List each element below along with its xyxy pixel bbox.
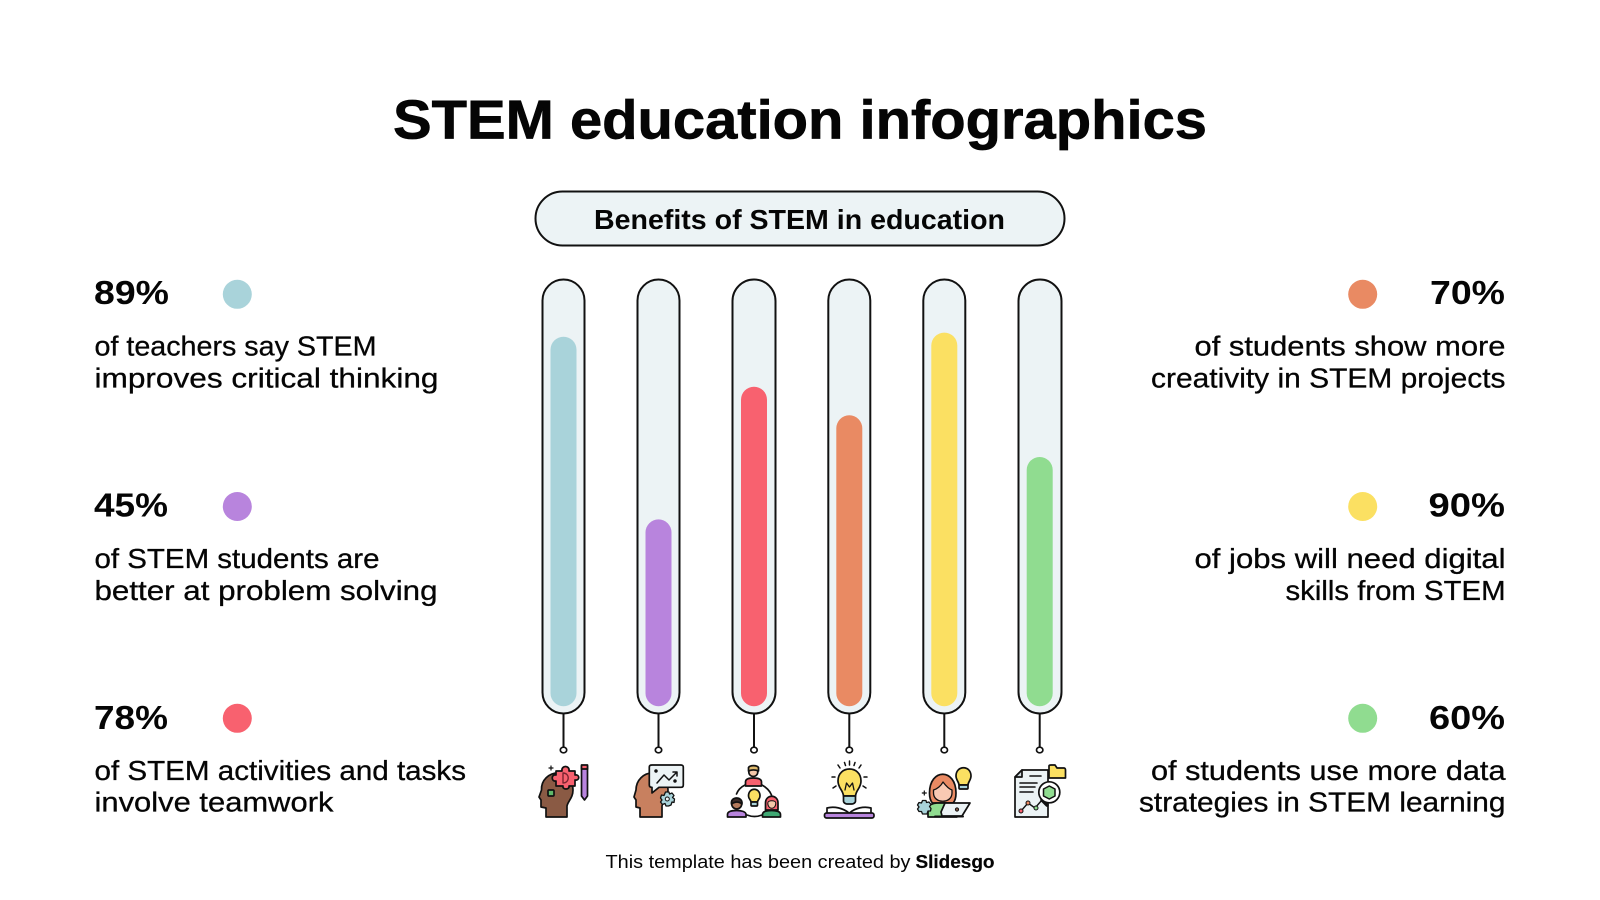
stat: 70% creativity: 70%: [1430, 274, 1505, 311]
tube: 78%: [732, 280, 776, 753]
tube chart: [542, 280, 1062, 753]
tube: 89%: [542, 280, 584, 753]
footer credit: This template has been created by: [606, 852, 910, 872]
stat: 90% jobs: skills from STEM: [1286, 575, 1506, 606]
subtitle pill: [536, 192, 1064, 246]
stat: 70% creativity: creativity in STEM projects: [1151, 363, 1506, 394]
stat: 70% creativity: [1151, 274, 1506, 394]
stat: 70% creativity: of students show more: [1194, 331, 1506, 362]
stat: 89% teachers: of teachers say STEM: [94, 331, 376, 362]
stat: 78% activities: [94, 699, 466, 818]
stat: 60% data: [1139, 699, 1506, 818]
stat: 89% teachers: 89%: [94, 274, 169, 311]
stat: 78% activities: of STEM activities and tasks: [94, 755, 466, 786]
tube: 90%: [923, 280, 965, 753]
stat: 45% students: [94, 487, 438, 606]
stat: 45% students: better at problem solving: [94, 575, 438, 606]
icon: light bulb over open book: [824, 761, 874, 818]
icon: woman at laptop with bulb and gear: [918, 768, 971, 817]
footer credit: Slidesgo: [916, 852, 995, 872]
stat: 78% activities: 78%: [94, 699, 168, 736]
stat: 89% teachers: improves critical thinking: [94, 363, 438, 394]
stat: 45% students: of STEM students are: [94, 543, 380, 574]
tube: 60%: [1018, 280, 1062, 753]
icon: head with chart bubble and gear: [634, 765, 683, 817]
tube: 70%: [828, 280, 870, 753]
subtitle pill: Benefits of STEM in education: [594, 204, 1005, 235]
icon: head with puzzle and pencil: [539, 765, 588, 817]
icon: team around a light bulb: [728, 766, 780, 817]
stat: 89% teachers: [94, 274, 438, 394]
stat: 45% students: 45%: [94, 487, 168, 524]
stat: 90% jobs: 90%: [1428, 487, 1505, 524]
stat: 60% data: 60%: [1429, 699, 1505, 736]
icon: report with magnifier and folder: [1015, 765, 1066, 817]
stat: 78% activities: involve teamwork: [94, 787, 335, 818]
stat: 90% jobs: [1194, 487, 1506, 606]
stat: 60% data: strategies in STEM learning: [1139, 787, 1506, 818]
stat: 60% data: of students use more data: [1151, 755, 1506, 786]
tube: 45%: [638, 280, 680, 753]
title: STEM education infographics: [393, 88, 1207, 150]
stat: 90% jobs: of jobs will need digital: [1194, 543, 1506, 574]
